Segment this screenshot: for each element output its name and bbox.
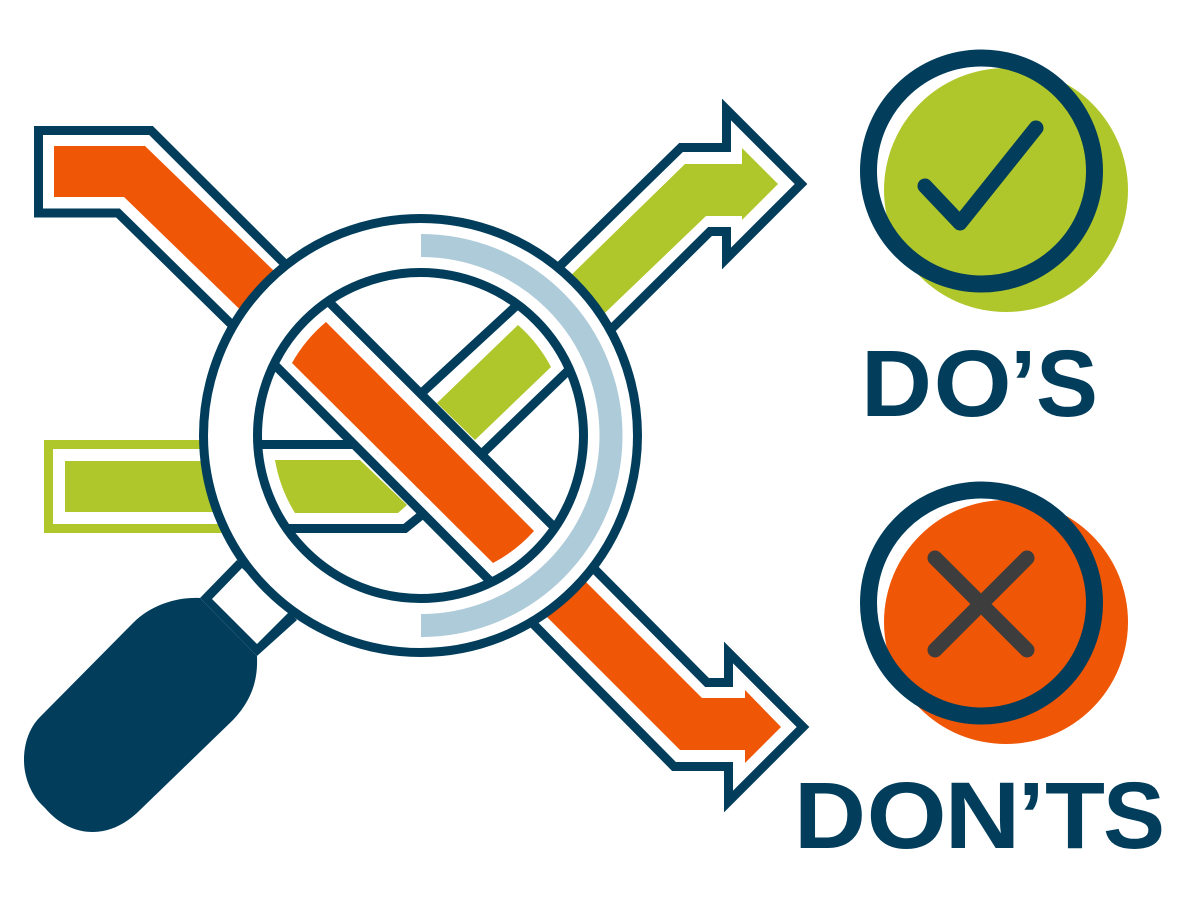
heading: don'ts: ’ bbox=[1018, 763, 1044, 869]
heading: do's: D bbox=[861, 331, 932, 437]
magnifying glass outer ring bbox=[204, 218, 638, 652]
arrow: green tail left bbox=[48, 444, 288, 528]
magnifying glass handle bbox=[24, 560, 297, 832]
magnified green arrow left bbox=[262, 440, 423, 533]
heading: don'ts: S bbox=[1103, 763, 1165, 869]
heading: do's: O bbox=[934, 331, 1012, 437]
heading: do's: ’ bbox=[1010, 331, 1036, 437]
heading: don'ts: O bbox=[867, 763, 947, 869]
arrow: orange down-right bbox=[480, 494, 803, 802]
heading: do's: S bbox=[1036, 331, 1098, 437]
arrow: orange tail top-left bbox=[38, 130, 335, 375]
heading: don'ts bbox=[794, 763, 1165, 869]
magnified orange band bbox=[275, 302, 554, 581]
lens inner ring bbox=[258, 272, 584, 598]
arrow: green up-right bbox=[520, 110, 801, 370]
lens contents bbox=[262, 302, 568, 581]
lens highlight arc bbox=[421, 246, 611, 626]
magnified green arrow diagonal bbox=[421, 305, 568, 454]
icon: do check circle bbox=[868, 58, 1128, 312]
heading: do's bbox=[861, 331, 1098, 437]
heading: don'ts: D bbox=[794, 763, 866, 869]
icon: don't cross circle bbox=[868, 490, 1128, 744]
heading: don'ts: T bbox=[1045, 763, 1105, 869]
heading: don'ts: N bbox=[944, 763, 1020, 869]
